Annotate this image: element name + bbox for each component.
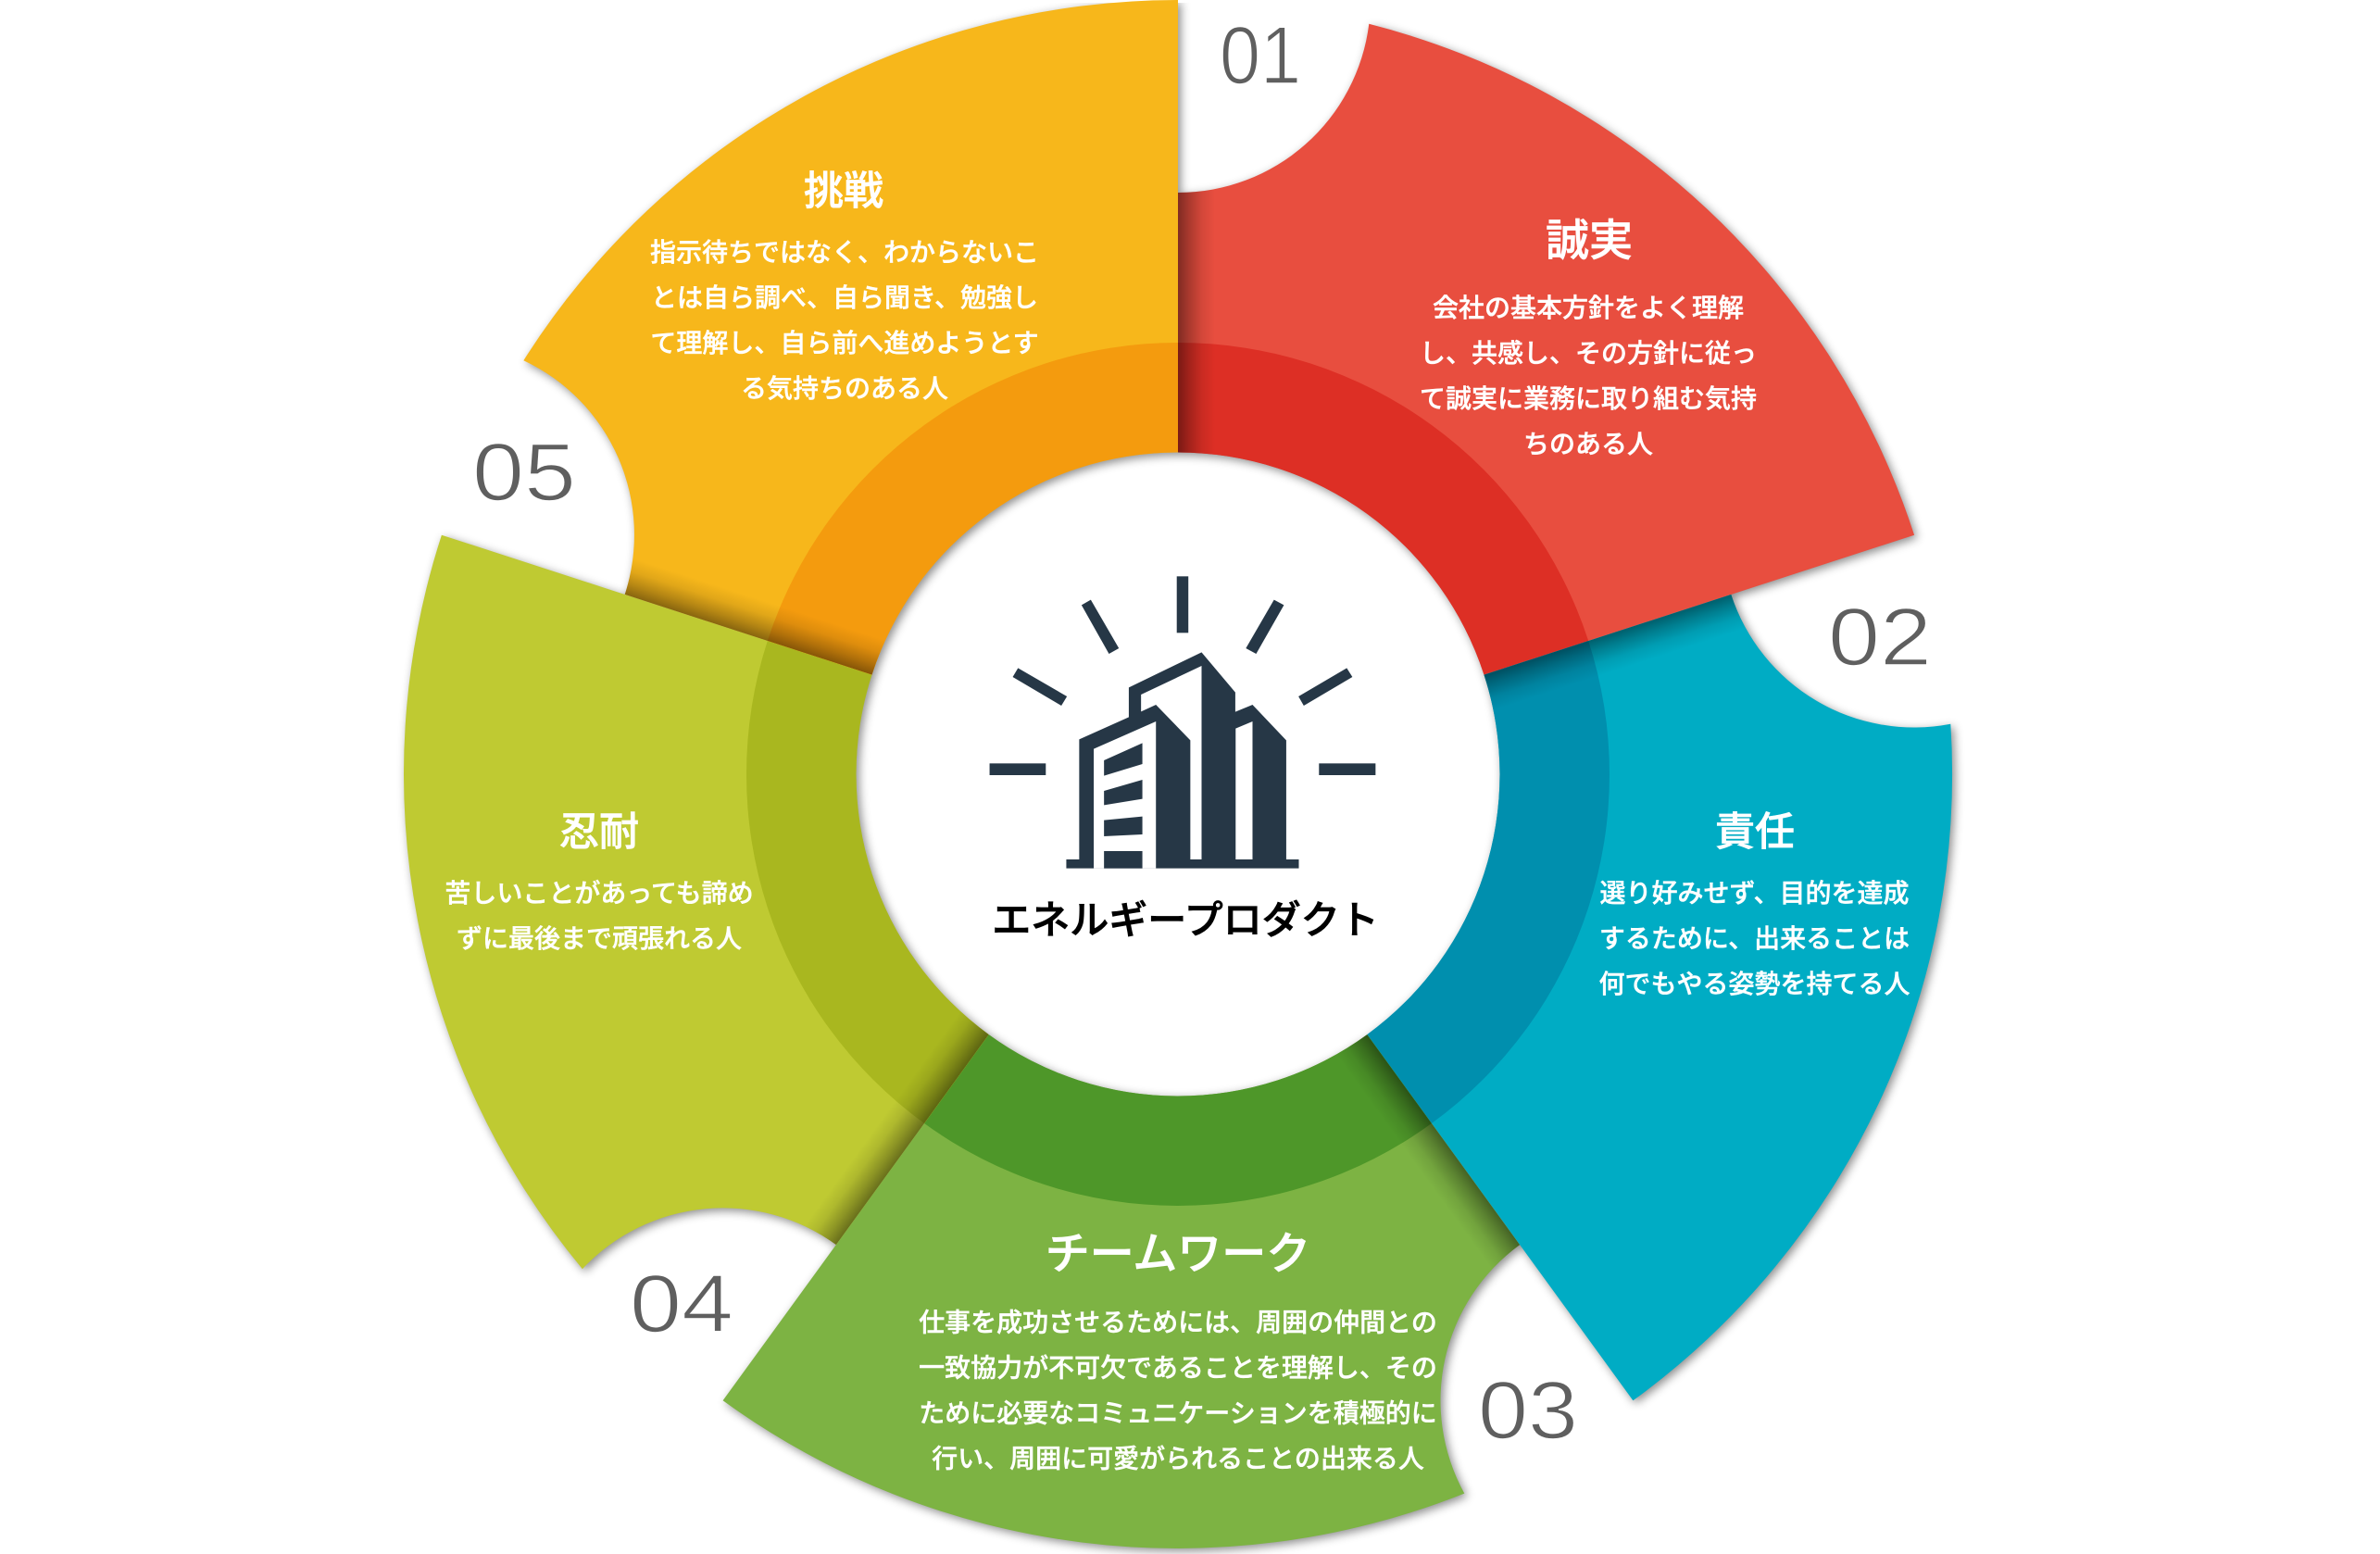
text block: 挑戦 description: とは自ら調べ、自ら聞き、勉強し (651, 283, 1038, 312)
text block: チームワーク description: ために必要なコミュニケーションを積極的に (919, 1398, 1437, 1428)
number: 03: 03 (1478, 1364, 1578, 1456)
text block: 挑戦 description: て理解し、自ら前へ進めようとす (650, 329, 1039, 357)
icon: office building with light rays (990, 576, 1375, 869)
text block: 責任 description: 選り好みせず、目的を達成 (1599, 879, 1910, 908)
text block: 誠実 description: 会社の基本方針をよく理解 (1433, 294, 1744, 322)
panel: 05 挑戦 (476, 0, 1178, 675)
text block: 責任 description (1598, 879, 1910, 998)
text block: 忍耐 description (445, 879, 754, 953)
text block: 忍耐 description: 苦しいことがあっても諦め (445, 879, 754, 908)
text block: チームワーク description: 仕事を成功させるためには、周囲の仲間との (919, 1308, 1437, 1337)
text block: チームワーク description (919, 1308, 1437, 1473)
text block: 挑戦 description: 指示待ちではなく、わからないこ (650, 238, 1039, 267)
number: 02: 02 (1828, 591, 1932, 683)
text block: 誠実 description (1420, 294, 1757, 458)
text block: 誠実 description: し、共感し、その方針に従っ (1420, 339, 1757, 368)
heading: 忍耐: 忍耐 (559, 810, 639, 855)
text block: 誠実 description: て誠実に業務に取り組む気持 (1420, 384, 1757, 413)
text block: 誠実 description: ちのある人 (1523, 430, 1653, 458)
text block: 忍耐 description: ずに最後まで頑張れる人 (457, 924, 742, 953)
icon: rays (990, 576, 1375, 775)
panel: 01 誠実 (1178, 24, 1914, 674)
panel: 03 チームワーク (722, 1034, 1573, 1548)
text block: 挑戦 description: る気持ちのある人 (741, 374, 948, 403)
heading: 誠実: 誠実 (1546, 216, 1633, 265)
icon: building silhouette (1066, 652, 1298, 869)
drop shadow of the five segments (404, 0, 1952, 1548)
number: 05: 05 (472, 426, 576, 518)
panel: 04 忍耐 (404, 535, 989, 1332)
heading: 責任: 責任 (1715, 810, 1795, 855)
title: エネルギープロダクト: エネルギープロダクト (992, 898, 1379, 942)
heading: 挑戦: 挑戦 (804, 169, 883, 214)
number: 01: 01 (1220, 9, 1301, 101)
text block: チームワーク description: 行い、周囲に可愛がられることの出来る人 (932, 1445, 1424, 1473)
text block: 責任 description: 何でもやる姿勢を持てる人 (1598, 970, 1910, 998)
panel: 02 責任 (1367, 595, 1952, 1400)
heading: チームワーク: チームワーク (1046, 1230, 1310, 1279)
text block: 責任 description: するために、出来ることは (1599, 924, 1910, 953)
text block: チームワーク description: 一致協力が不可欠であることを理解し、その (919, 1354, 1437, 1382)
number: 04: 04 (630, 1258, 733, 1349)
text block: 挑戦 description (650, 238, 1039, 403)
